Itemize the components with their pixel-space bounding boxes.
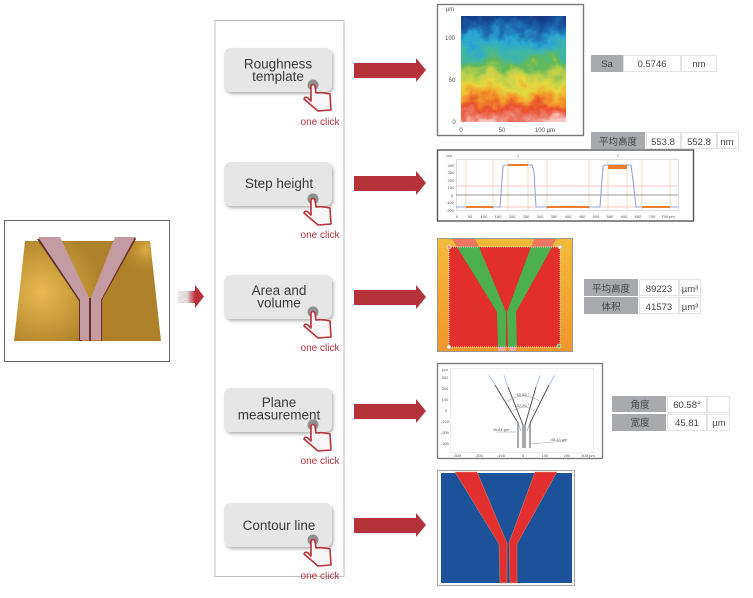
table: height and volume: 41573: [646, 302, 672, 313]
chart: step height profile: 550: [607, 214, 614, 219]
table: average height: nm: [720, 137, 734, 148]
chart: roughness height map: 50: [449, 78, 456, 84]
chart: step height profile: 0: [451, 193, 454, 198]
arrow: step height: [354, 171, 426, 195]
chart: plane measurement: 0: [522, 453, 525, 458]
chart: plane measurement: 100: [442, 397, 449, 402]
table: height and volume: µm³: [682, 302, 698, 313]
arrow: roughness: [354, 58, 426, 82]
arrow: area and volume: [354, 285, 426, 309]
chart: step height profile: 100: [448, 185, 455, 190]
table: height and volume: µm³: [682, 284, 698, 295]
button: Roughness template: [224, 48, 340, 128]
table: average height: 553.8: [651, 137, 675, 148]
chart: plane measurement: 45.33 µm: [551, 437, 568, 442]
chart: plane measurement: -200: [475, 453, 484, 458]
button: Plane measurement: [224, 388, 340, 467]
button: Area and volume: [224, 275, 340, 354]
chart: step height profile: 300: [448, 170, 455, 175]
chart: step height profile: 700: [649, 214, 656, 219]
chart: step height profile: 250: [523, 214, 530, 219]
arrow: contour line: [354, 513, 426, 537]
chart: plane measurement: 60.58 °: [517, 392, 530, 397]
table: angle and width: 45.81: [675, 418, 699, 429]
button: Step height: Step height: [245, 176, 313, 191]
chart: step height profile: 100: [481, 214, 488, 219]
chart: plane measurement: 300: [442, 375, 449, 380]
chart: plane measurement: µm: [442, 367, 448, 372]
button: Area and volume: volume: [257, 296, 301, 310]
table: angle and width: 60.58°: [673, 400, 701, 411]
button: Step height: one click: [301, 230, 340, 241]
chart: step height profile: [438, 150, 694, 221]
button: Contour line: [224, 503, 340, 582]
chart: step height profile: 650: [635, 214, 642, 219]
button: Area and volume: one click: [301, 343, 340, 354]
chart: plane measurement: 200: [442, 386, 449, 391]
chart: step height profile: 300: [537, 214, 544, 219]
chart: roughness height map: [438, 0, 590, 140]
chart: plane measurement: [438, 364, 602, 458]
chart: step height profile: nm: [446, 153, 452, 158]
button: Contour line: one click: [301, 571, 340, 582]
image: contour line map: [438, 470, 574, 586]
chart: plane measurement: 100: [542, 453, 549, 458]
chart: plane measurement: 300 µm: [581, 453, 595, 458]
chart: step height profile: 500: [593, 214, 600, 219]
chart: step height profile: 50: [468, 214, 473, 219]
button: Area and volume: Area and: [252, 283, 306, 298]
chart: plane measurement: 200: [564, 453, 571, 458]
button: Plane measurement: one click: [301, 456, 340, 467]
button: Contour line: Contour line: [243, 518, 315, 533]
table: height and volume: 平均高度: [592, 283, 630, 295]
chart: plane measurement: -100: [497, 453, 506, 458]
button: Plane measurement: Plane: [262, 395, 296, 410]
table: height and volume: [584, 279, 700, 314]
chart: step height profile: 200: [509, 214, 516, 219]
button: Roughness template: one click: [301, 117, 340, 128]
arrow: sample to methods: [178, 285, 204, 308]
chart: step height profile: 400: [448, 163, 455, 168]
table: average height: [591, 132, 738, 149]
chart: roughness height map: 100 µm: [535, 128, 555, 134]
chart: roughness height map: 50: [499, 128, 506, 134]
chart: step height profile: 400: [565, 214, 572, 219]
table: Sa: Sa: [601, 59, 614, 70]
chart: step height profile: -200: [446, 208, 455, 213]
chart: roughness height map: 0: [459, 128, 463, 134]
chart: plane measurement: -300: [453, 453, 462, 458]
chart: step height profile: 1: [517, 153, 520, 158]
chart: step height profile: 200: [448, 178, 455, 183]
chart: roughness height map: 0: [452, 120, 456, 126]
image: area and volume map: [437, 238, 573, 352]
chart: step height profile: 450: [579, 214, 586, 219]
table: Sa: nm: [692, 59, 706, 70]
table: Sa: 0.5746: [637, 59, 667, 70]
chart: step height profile: 0: [456, 214, 459, 219]
chart: roughness height map: 100: [445, 36, 456, 42]
chart: plane measurement: -100: [441, 419, 450, 424]
chart: plane measurement: 0: [445, 408, 448, 413]
table: angle and width: [612, 396, 730, 431]
chart: plane measurement: 57.26 °: [517, 403, 530, 408]
chart: step height profile: 350: [551, 214, 558, 219]
table: angle and width: 宽度: [630, 417, 650, 429]
chart: step height profile: 750 µm: [661, 214, 675, 219]
chart: plane measurement: -300: [441, 441, 450, 446]
button: Step height: [224, 162, 340, 241]
table: height and volume: 89223: [646, 284, 672, 295]
table: average height: 552.8: [687, 137, 711, 148]
step-height measurement segments: [466, 164, 670, 208]
sample image: Y-shaped structure on gold: [4, 220, 170, 362]
button: Roughness template: template: [252, 69, 304, 84]
chart: step height profile: 150: [495, 214, 502, 219]
chart: step height profile: 600: [621, 214, 628, 219]
table: angle and width: 角度: [630, 399, 650, 411]
chart: step height profile: -100: [446, 200, 455, 205]
table: angle and width: µm: [712, 418, 726, 429]
button: Plane measurement: measurement: [238, 408, 321, 422]
button: Roughness template: Roughness: [244, 56, 312, 72]
table: average height: 平均高度: [599, 136, 637, 148]
chart: step height profile: 2: [617, 153, 620, 158]
chart: plane measurement: 45.81 µm: [493, 427, 510, 432]
chart: roughness height map: µm: [446, 7, 454, 13]
panel: measurement methods: [215, 20, 344, 582]
table: Sa: [591, 55, 716, 72]
arrow: plane measurement: [354, 399, 426, 423]
table: height and volume: 体积: [601, 301, 621, 313]
chart: plane measurement: -200: [441, 430, 450, 435]
